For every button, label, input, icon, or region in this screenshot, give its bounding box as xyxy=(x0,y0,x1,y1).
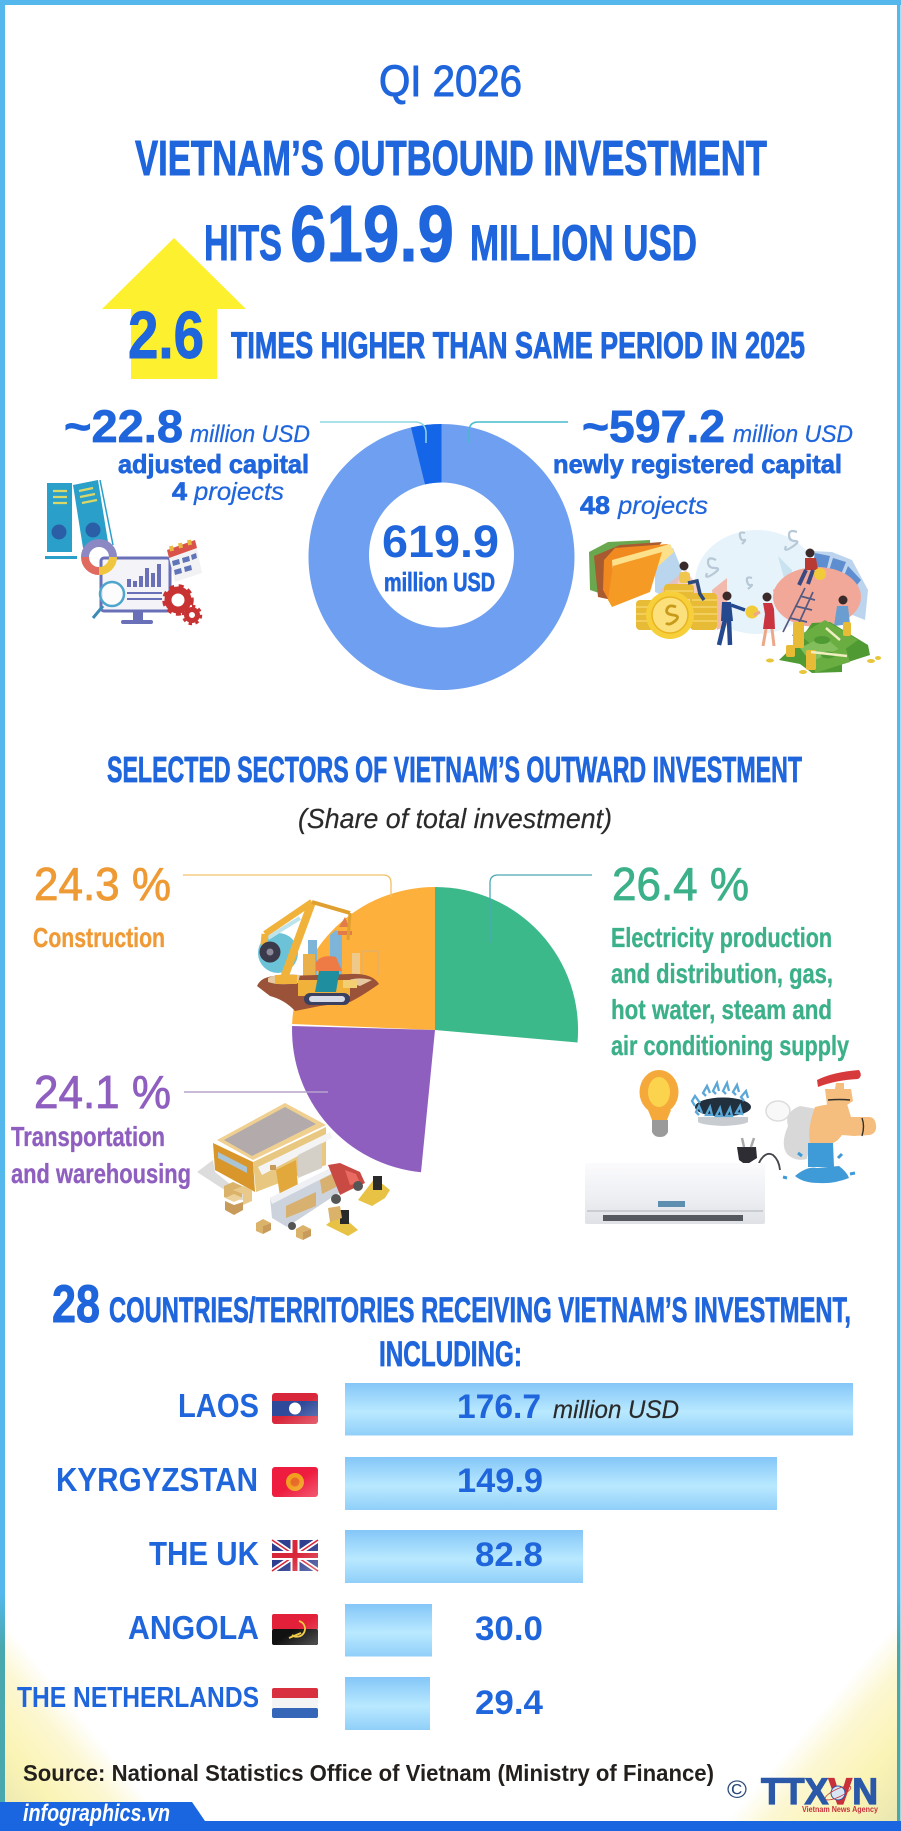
label: adjusted capital xyxy=(118,449,309,479)
donut: adjusted share xyxy=(411,424,442,484)
footer site name: infographics.vn xyxy=(23,1800,170,1827)
icon: yellow up arrow xyxy=(102,238,246,379)
icon: flag Netherlands xyxy=(272,1688,318,1718)
project word: projects xyxy=(193,478,284,506)
icon: flag Angola xyxy=(272,1614,318,1645)
source note: Source: National Statistics Office of Vietnam (Ministry of Finance) xyxy=(23,1760,714,1786)
callout: newly registered capital xyxy=(553,401,853,520)
copyright mark: © xyxy=(727,1776,748,1804)
yellow corner right xyxy=(727,1623,897,1821)
icon: flag UK xyxy=(272,1540,318,1571)
callout: transportation xyxy=(11,1066,191,1189)
slice: transportation xyxy=(292,1026,435,1172)
row: Kyrgyzstan xyxy=(56,1457,777,1510)
title: hits: HITS xyxy=(204,215,282,271)
count: 28 xyxy=(52,1275,100,1334)
icon: excavator on construction site xyxy=(257,902,379,1011)
value: ~597.2 xyxy=(582,401,725,452)
unit: million USD xyxy=(733,421,853,448)
section heading: destinations xyxy=(52,1275,851,1374)
row: UK xyxy=(149,1530,583,1583)
project count: 4 xyxy=(172,478,187,506)
value: ~22.8 xyxy=(64,401,183,452)
name: Construction xyxy=(33,922,165,953)
leader line: electricity xyxy=(490,875,592,943)
callout: adjusted capital xyxy=(64,401,310,506)
icon: binders and analytics dashboard xyxy=(45,480,202,624)
bar chart: destinations xyxy=(17,1383,853,1730)
title block xyxy=(135,57,767,278)
icon: air conditioner xyxy=(585,1163,765,1224)
share: 24.3 % xyxy=(34,858,171,910)
icon: bulb xyxy=(640,1070,678,1137)
label: newly registered capital xyxy=(553,449,842,479)
slice: electricity xyxy=(435,887,578,1042)
row: Netherlands: 29.4 xyxy=(475,1684,543,1722)
icon: gas burner xyxy=(692,1083,751,1126)
row: Kyrgyzstan: KYRGYZSTAN xyxy=(56,1461,258,1498)
icon: plug xyxy=(737,1138,780,1176)
icon: flag Laos xyxy=(272,1393,318,1424)
name line 2: and warehousing xyxy=(11,1158,191,1189)
slice: construction xyxy=(292,887,435,1030)
leader line: construction xyxy=(183,875,391,897)
row: Netherlands xyxy=(17,1677,543,1730)
row: Laos: million USD xyxy=(553,1396,679,1424)
callout: construction xyxy=(33,858,171,953)
donut: newly registered share xyxy=(308,424,574,690)
title: headline number: 619.9 xyxy=(290,189,454,278)
name line 3: hot water, steam and xyxy=(611,994,832,1025)
icon: hot water tap and steam xyxy=(766,1070,876,1183)
row: Kyrgyzstan: 149.9 xyxy=(457,1462,543,1500)
section subtitle: (Share of total investment) xyxy=(298,803,612,834)
icon: energy and utilities group xyxy=(585,1070,876,1224)
project count: 48 xyxy=(580,492,610,520)
project word: projects xyxy=(617,492,708,520)
logo: TTXVN: Vietnam News Agency xyxy=(802,1805,878,1814)
icon: flag Kyrgyzstan xyxy=(272,1467,318,1497)
row: Laos: LAOS xyxy=(178,1387,259,1424)
row: UK: THE UK xyxy=(149,1535,259,1572)
pie chart xyxy=(292,887,578,1172)
title: unit: MILLION USD xyxy=(470,215,697,271)
name line 2: and distribution, gas, xyxy=(611,958,833,989)
title: period: QI 2026 xyxy=(379,57,522,106)
icon: investment and piggy bank scene xyxy=(589,530,881,674)
row: Laos xyxy=(178,1383,853,1436)
icon: warehouse with truck and forklifts xyxy=(197,1103,390,1240)
name line 1: Transportation xyxy=(11,1121,165,1152)
growth multiplier: 2.6 xyxy=(128,298,204,373)
leader line: adjusted xyxy=(320,422,426,443)
row: Angola xyxy=(128,1604,543,1656)
donut chart xyxy=(308,424,574,690)
leader line: transportation xyxy=(184,1091,328,1093)
unit: million USD xyxy=(190,421,310,448)
yellow corner left xyxy=(5,1623,165,1821)
share: 26.4 % xyxy=(612,858,749,910)
footer band xyxy=(0,1800,901,1831)
row: UK: 82.8 xyxy=(475,1536,543,1574)
row: Laos: 176.7 xyxy=(457,1388,541,1426)
name line 1: Electricity production xyxy=(611,922,832,953)
share: 24.1 % xyxy=(34,1066,171,1118)
row: Angola: ANGOLA xyxy=(128,1609,259,1646)
donut: centre unit: million USD xyxy=(384,567,495,597)
callout: electricity xyxy=(611,858,849,1061)
row: Angola: 30.0 xyxy=(475,1610,543,1648)
donut: centre value: 619.9 xyxy=(382,516,499,567)
heading line 2: INCLUDING: xyxy=(379,1335,522,1374)
logo: TTXVN: TTXVN xyxy=(761,1771,878,1812)
leader line: new xyxy=(469,422,568,443)
row: Netherlands: THE NETHERLANDS xyxy=(17,1682,259,1714)
